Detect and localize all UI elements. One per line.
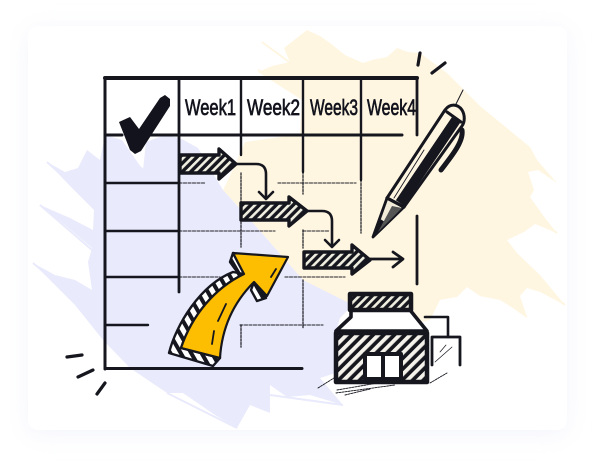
column headers: Week1 [185,95,236,120]
ground shadow [318,373,447,395]
brush stroke: cream [223,30,565,323]
door [365,354,401,379]
chart grid [105,78,417,369]
accent marks: bottom left [67,355,105,394]
bar arrow: week 1 [180,149,236,179]
icon: building [318,294,460,395]
roof [350,294,411,310]
arrow: to week 4 [370,252,403,267]
bar arrow: week 3 [304,245,370,274]
neck [336,310,427,331]
icon: yellow arrow [169,253,288,366]
connector arrow: week 2 to week 3 [308,211,339,247]
column headers: Week4 [367,95,416,120]
accent marks: top right [418,53,445,73]
annex [432,337,460,365]
icon: check mark [119,95,170,154]
bar arrow: week 2 [241,197,307,226]
icon: pen [373,90,464,237]
connector arrow: week 1 to week 2 [237,164,273,199]
column headers [185,95,416,120]
body [336,333,427,382]
card background [28,26,567,434]
pipe [425,317,448,337]
column headers: Week2 [247,95,300,120]
column headers: Week3 [310,95,358,120]
brush stroke: lavender [33,135,353,428]
